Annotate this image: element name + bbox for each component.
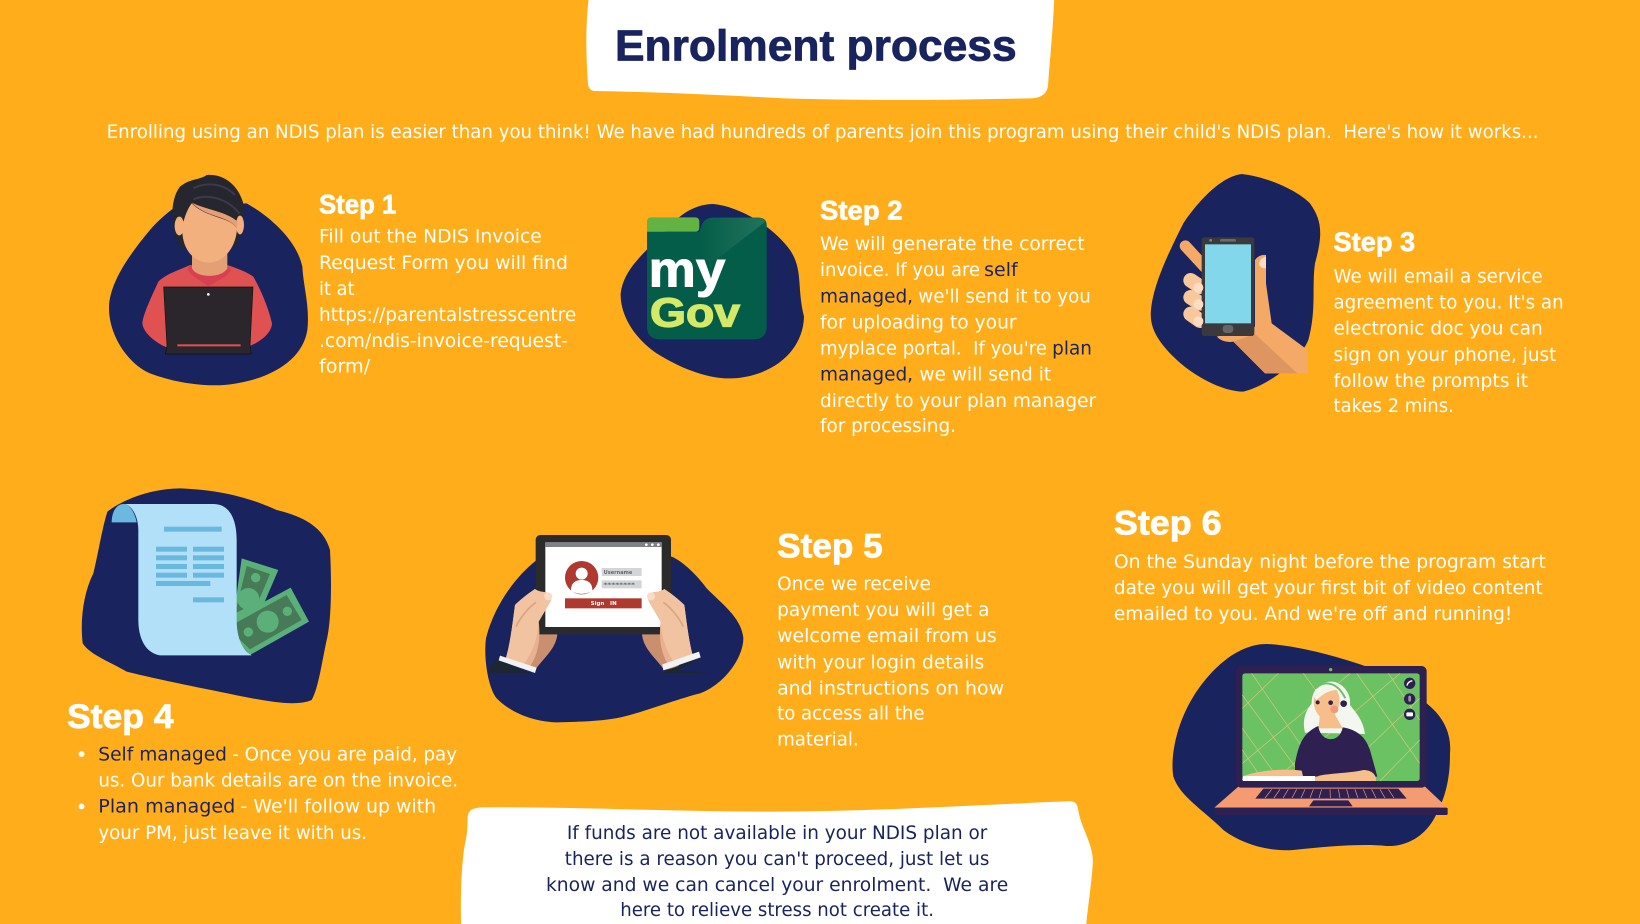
step 2 illustration: myGov logo — [621, 204, 804, 378]
step 5 text: and instructions on how — [777, 678, 1004, 699]
step 5 text: welcome email from us — [777, 626, 997, 647]
step 1 text — [319, 189, 576, 377]
step 4 text: - We'll follow up with — [241, 797, 436, 818]
step 5 text — [777, 527, 1004, 751]
step 4 text: Plan managed — [98, 797, 235, 818]
bottom note panel — [461, 801, 1093, 924]
step 2 text: We will generate the correct — [820, 234, 1085, 255]
step 2 illustration: myGov logo: Gov — [650, 290, 740, 336]
step 2 text: we'll send it to you — [918, 286, 1091, 307]
step 1 illustration: person at laptop — [109, 175, 308, 385]
step 2 illustration: myGov logo: my — [649, 242, 726, 298]
step 6 text — [1114, 504, 1546, 625]
step 4 text: Step 4 — [67, 698, 174, 736]
step 5 text: payment you will get a — [777, 600, 989, 621]
step 2 text: for processing. — [820, 416, 956, 437]
step 5 text: Step 5 — [777, 527, 883, 565]
step 4 text: your PM, just leave it with us. — [98, 823, 367, 844]
step 6 text: date you will get your first bit of video content — [1114, 578, 1543, 599]
step 5 illustration: tablet sign-in: Username — [604, 570, 633, 576]
step 1 text: Fill out the NDIS Invoice — [319, 227, 542, 248]
title panel — [586, 0, 1054, 100]
step 5 illustration: tablet sign-in: Sign IN — [591, 601, 617, 607]
step 4 text: us. Our bank details are on the invoice. — [98, 771, 458, 792]
step 3 text: electronic doc you can — [1334, 319, 1543, 340]
step 5 text: to access all the — [777, 704, 925, 725]
step 5 illustration: tablet sign-in: ******** — [603, 582, 635, 588]
step 1 text: form/ — [319, 356, 371, 377]
step 6 text: Step 6 — [1114, 504, 1222, 542]
step 6 text: emailed to you. And we're off and running! — [1114, 604, 1512, 625]
bottom note panel: here to relieve stress not create it. — [620, 900, 934, 921]
step 1 text: Step 1 — [319, 189, 397, 219]
step 5 text: with your login details — [777, 652, 984, 673]
step 3 illustration: hand holding phone — [1151, 174, 1320, 392]
step 4 text — [67, 698, 458, 844]
bottom note panel: there is a reason you can't proceed, just let us — [565, 849, 989, 870]
step 4 text: - Once you are paid, pay — [232, 744, 457, 765]
step 2 text: plan — [1052, 339, 1092, 360]
step 5 text: Once we receive — [777, 574, 931, 595]
step 2 text: myplace portal. If you're — [820, 339, 1047, 360]
step 2 text: Step 2 — [820, 196, 903, 226]
intro text: Enrolling using an NDIS plan is easier than you think! We have had hundreds of parents join this program using their child's NDIS plan. Here's how it works... — [107, 122, 1539, 143]
step 3 text: We will email a service — [1334, 266, 1543, 287]
step 3 text: Step 3 — [1334, 227, 1415, 257]
step 2 text: managed, — [820, 365, 913, 386]
step 5 illustration: tablet sign-in — [485, 535, 743, 722]
step 3 text: agreement to you. It's an — [1334, 293, 1564, 314]
step 3 text — [1334, 227, 1564, 417]
step 1 text: https://parentalstresscentre — [319, 305, 576, 326]
step 3 text: sign on your phone, just — [1334, 345, 1556, 366]
step 1 text: it at — [319, 279, 355, 300]
step 1 text: .com/ndis-invoice-request- — [319, 331, 568, 352]
step 4 illustration: invoice and money — [82, 488, 331, 703]
title: Enrolment process — [615, 22, 1017, 71]
step 1 text: Request Form you will find — [319, 253, 568, 274]
step 2 text: directly to your plan manager — [820, 391, 1097, 412]
step 2 text: for uploading to your — [820, 312, 1017, 333]
step 2 text — [820, 196, 1097, 437]
step 5 text: material. — [777, 730, 859, 751]
step 2 text: invoice. If you are — [820, 260, 980, 281]
step 6 illustration: laptop video call — [1172, 644, 1450, 850]
step 3 text: takes 2 mins. — [1334, 396, 1454, 417]
step 2 text: self — [984, 260, 1018, 281]
step 2 text: we will send it — [919, 365, 1051, 386]
bottom note panel: If funds are not available in your NDIS plan or — [567, 823, 988, 844]
step 3 text: follow the prompts it — [1334, 371, 1528, 392]
step 4 text: Self managed — [98, 744, 227, 765]
step 2 text: managed, — [820, 286, 913, 307]
step 6 text: On the Sunday night before the program start — [1114, 552, 1546, 573]
bottom note panel: know and we can cancel your enrolment. We are — [546, 875, 1008, 896]
